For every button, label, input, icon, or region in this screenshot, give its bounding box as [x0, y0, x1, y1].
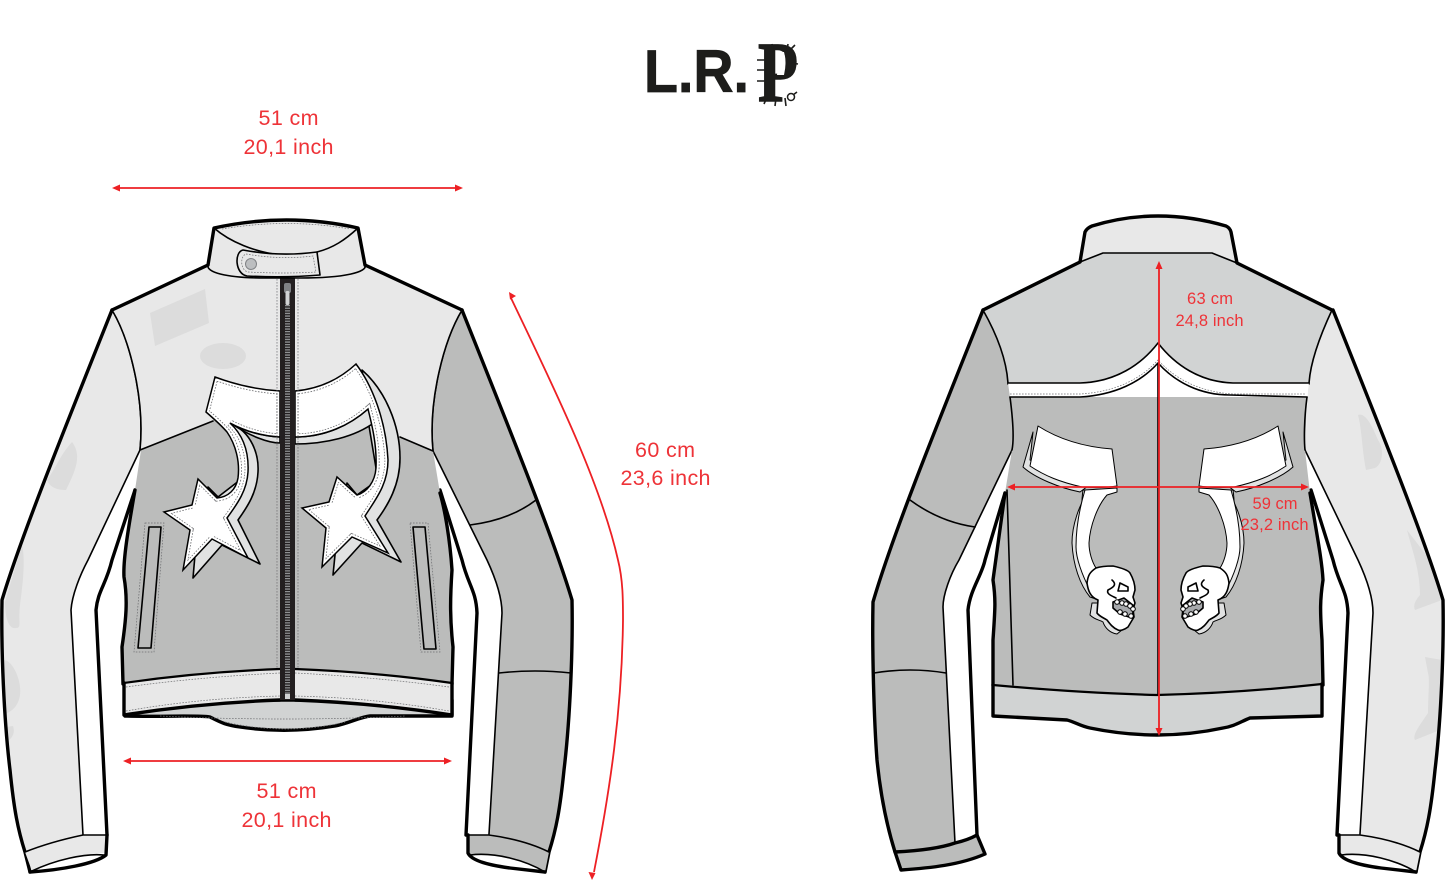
back left cuff [895, 835, 985, 870]
measurement: front hem width [123, 758, 452, 832]
skull eye [1118, 583, 1128, 591]
sleeve patches [1358, 415, 1442, 740]
back hem band [993, 684, 1322, 735]
back jacket [873, 216, 1443, 872]
top width arrow [112, 184, 463, 192]
back left sleeve [873, 310, 1012, 870]
skull [1087, 566, 1135, 630]
collar strap [237, 250, 320, 277]
back right sleeve [1305, 310, 1443, 872]
back width label: 59 cm [1252, 495, 1298, 513]
back width label [1240, 495, 1308, 534]
measurement: sleeve length [509, 292, 710, 880]
left emblem star shadow [193, 423, 280, 578]
top width label [244, 106, 334, 159]
emblem white horn [1076, 488, 1117, 590]
zipper slider [284, 283, 291, 305]
front body [122, 390, 453, 686]
back length label [1176, 290, 1244, 330]
skull mouth and teeth [1113, 598, 1135, 618]
back body [993, 363, 1323, 700]
yoke oval patch [200, 343, 246, 369]
back yoke white band [1008, 343, 1309, 397]
sleeve length label [620, 438, 710, 490]
sleeve length arrow [509, 292, 623, 880]
logo letters L.R.: L.R. [644, 38, 749, 105]
logo gothic P monogram: P [758, 24, 798, 120]
back right emblem mirrored [1181, 426, 1293, 634]
zipper [277, 278, 298, 700]
emblem horn shadow [1072, 490, 1099, 600]
right emblem star shadow [295, 370, 401, 575]
back left emblem: banner, horn and skull [1023, 426, 1135, 634]
back yoke [983, 253, 1332, 384]
left emblem letter and star [164, 377, 280, 570]
front hem band [124, 669, 452, 729]
front right sleeve [432, 310, 572, 872]
front collar [208, 219, 365, 278]
emblem white banner [1030, 426, 1117, 488]
back length label: 63 cm [1187, 290, 1233, 308]
front jacket [2, 219, 572, 872]
back length label: 24,8 inch [1176, 312, 1244, 330]
logo [644, 24, 798, 120]
top width label: 51 cm [258, 106, 318, 130]
top width label: 20,1 inch [244, 135, 334, 159]
front yoke [112, 250, 462, 451]
measurement: front chest top width [112, 106, 463, 192]
hem width label: 51 cm [256, 779, 316, 803]
hem width label: 20,1 inch [242, 808, 332, 832]
emblem banner shadow [1023, 432, 1088, 492]
hem width label [242, 779, 332, 832]
measurement: back width [1007, 484, 1309, 534]
measurement: back length [1156, 261, 1244, 736]
back collar [1080, 216, 1237, 270]
yoke patch [150, 289, 209, 346]
hem width arrow [123, 758, 452, 764]
front left sleeve [2, 310, 141, 872]
back width arrow [1007, 484, 1309, 490]
front right pocket [410, 523, 440, 652]
right emblem letter and star [295, 364, 388, 567]
collar snap [246, 258, 256, 270]
back width label: 23,2 inch [1240, 516, 1308, 534]
sleeve length label: 23,6 inch [620, 466, 710, 490]
back length arrow [1156, 261, 1162, 736]
sleeve length label: 60 cm [635, 438, 695, 462]
front left pocket [134, 523, 164, 652]
jaw shadow [1090, 603, 1122, 634]
front hem back layer [125, 700, 452, 730]
